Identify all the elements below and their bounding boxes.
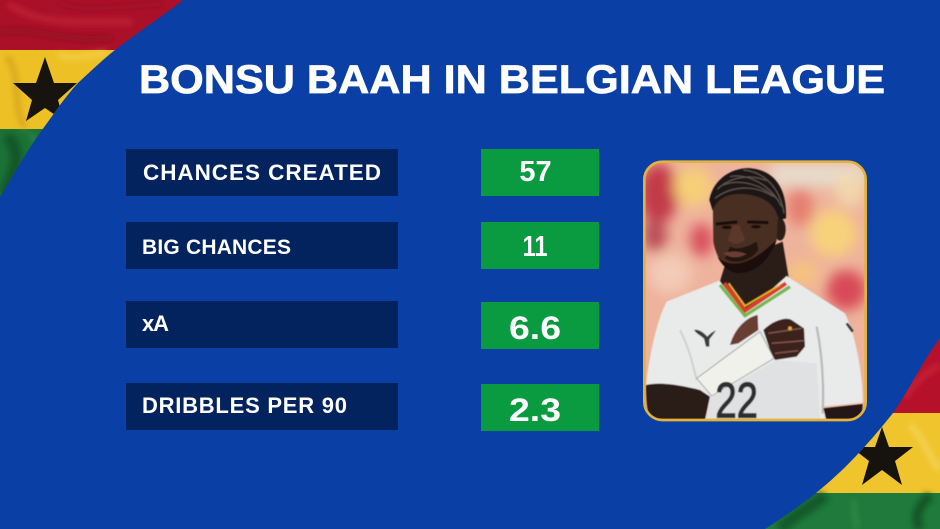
row: xA value: 6.6: [509, 310, 561, 346]
icon: black star: [858, 427, 913, 485]
row: big chances value: [481, 222, 599, 269]
chest patch: [730, 315, 758, 345]
row: big chances value: 11: [522, 231, 548, 263]
row: dribbles per 90 value: 2.3: [509, 392, 561, 428]
ear: [774, 218, 786, 241]
shirt number: 22: [715, 372, 758, 428]
forearm: [646, 384, 710, 420]
neck: [719, 242, 789, 311]
row: dribbles per 90 label: [126, 383, 398, 430]
row: big chances label: [126, 222, 398, 269]
sleeve and arm: [823, 404, 863, 420]
row: chances created label: [126, 149, 398, 196]
bandage: [697, 332, 774, 396]
photo: player in white Ghana kit: [638, 160, 867, 428]
row: xA value: [481, 302, 599, 349]
flag: top-left Ghana flag: [0, 0, 190, 199]
row: chances created value: [481, 149, 599, 196]
icon: black star: [13, 57, 77, 121]
row: xA label: xA: [142, 311, 169, 336]
row: dribbles per 90 value: [481, 384, 599, 431]
title: BONSU BAAH IN BELGIAN LEAGUE: [139, 58, 885, 102]
row: xA label: [126, 301, 398, 348]
row: chances created value: 57: [519, 156, 552, 188]
head: [713, 190, 779, 273]
row: dribbles per 90 label: DRIBBLES PER 90: [142, 393, 347, 418]
hair: [709, 168, 786, 220]
flag: bottom-right Ghana flag: [760, 330, 940, 529]
jersey: [646, 276, 863, 420]
row: big chances label: BIG CHANCES: [142, 236, 291, 259]
hand: [763, 319, 805, 360]
row: chances created label: CHANCES CREATED: [143, 160, 381, 185]
puma logo: [694, 330, 716, 347]
collar: [720, 285, 790, 316]
